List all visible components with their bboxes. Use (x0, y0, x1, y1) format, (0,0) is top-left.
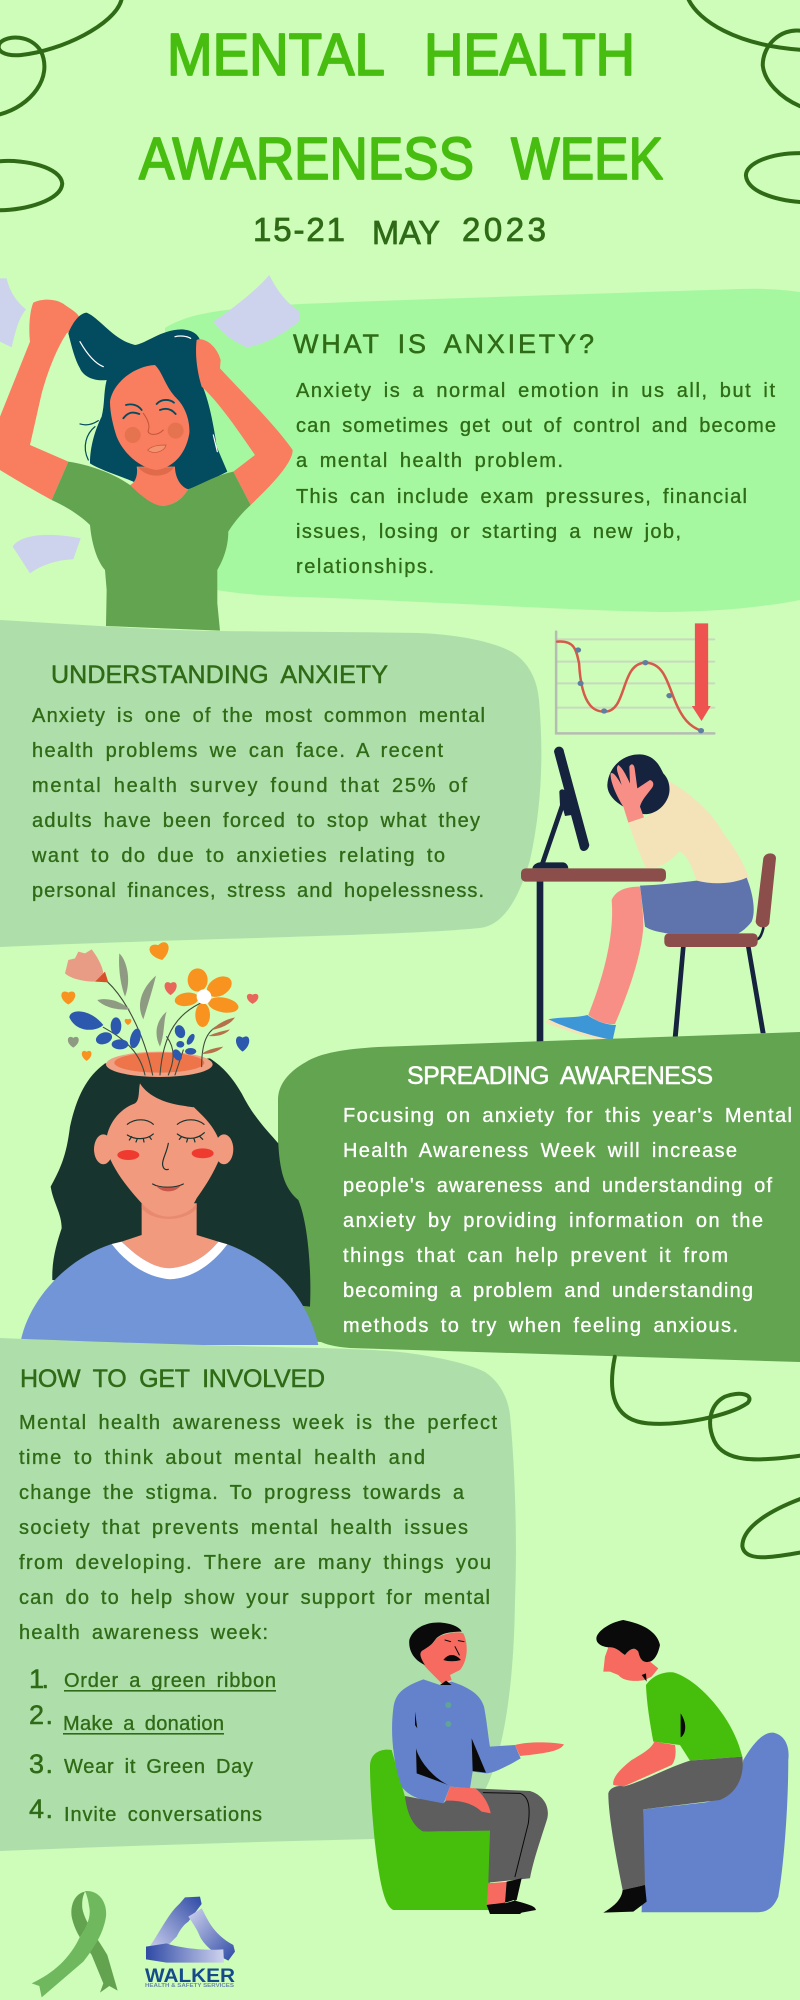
logo: Walker Health & Safety Services: WALKER (145, 1966, 235, 1987)
text block: understanding anxiety: health problems we can face. A recent (32, 740, 443, 762)
panel: how to get involved background (0, 1338, 516, 1851)
text block: spreading awareness: Focusing on anxiety for this year's Mental (343, 1105, 792, 1127)
list: ways to get involved: 4. (29, 1794, 53, 1824)
illustration: stressed woman at desk (521, 747, 776, 1045)
date: 2023 (462, 211, 546, 248)
text block: how to get involved: from developing. There are many things you (19, 1552, 491, 1574)
text block: what is anxiety: Anxiety is a normal emotion in us all, but it (296, 380, 775, 402)
date (253, 211, 546, 251)
text block: spreading awareness: becoming a problem and understanding (343, 1280, 753, 1302)
text block: what is anxiety: issues, losing or starting a new job, (296, 521, 681, 543)
text block: what is anxiety: can sometimes get out of control and become (296, 415, 776, 437)
text block: understanding anxiety: want to do due to anxieties relating to (31, 845, 445, 867)
text block: how to get involved: time to think about mental health and (19, 1447, 425, 1469)
logo: Walker Health & Safety Services (145, 1897, 235, 1989)
text block: what is anxiety: relationships. (296, 556, 434, 578)
text block: spreading awareness: people's awareness and understanding of (343, 1175, 772, 1197)
text block: understanding anxiety (31, 705, 485, 902)
panel: understanding anxiety background (0, 620, 541, 947)
text block: understanding anxiety: Anxiety is one of the most common mental (32, 705, 485, 727)
decorative curls: top corners (0, 0, 800, 210)
text block: understanding anxiety: mental health survey found that 25% of (32, 775, 467, 797)
list: ways to get involved: 1. (29, 1664, 49, 1694)
chart: falling line with red arrow (556, 623, 714, 733)
heading: what is anxiety: WHAT IS ANXIETY? (293, 329, 594, 359)
list: ways to get involved: Make a donation (63, 1713, 224, 1735)
decorative curls: lower right (612, 1357, 800, 1557)
text block: what is anxiety: This can include exam pressures, financial (296, 486, 747, 508)
text block: understanding anxiety: adults have been forced to stop what they (32, 810, 480, 832)
list: ways to get involved: 3. (29, 1749, 53, 1779)
text block: spreading awareness: methods to try when feeling anxious. (343, 1315, 738, 1337)
icon: flowers, leaves and hearts (61, 941, 258, 1075)
panel: spreading awareness background (278, 1032, 800, 1362)
title: WEEK (511, 126, 663, 192)
text block: how to get involved: Mental health awareness week is the perfect (19, 1412, 497, 1434)
date: 15-21 (253, 211, 345, 248)
text block: understanding anxiety: personal finances, stress and hopelessness. (32, 880, 484, 902)
text block: how to get involved: society that prevents mental health issues (19, 1517, 468, 1539)
illustration: two men talking on armchairs (370, 1620, 789, 1914)
list: ways to get involved: Invite conversations (64, 1804, 262, 1826)
title: MENTAL (167, 22, 385, 88)
text block: how to get involved: can do to help show your support for mental (19, 1587, 490, 1609)
text block: spreading awareness (343, 1105, 792, 1337)
text block: how to get involved (19, 1412, 497, 1644)
heading: understanding anxiety: UNDERSTANDING ANXIETY (51, 661, 388, 689)
heading: how to get involved: HOW TO GET INVOLVED (20, 1365, 325, 1393)
title (139, 22, 663, 192)
illustration: calm woman with flowers growing from head (20, 941, 318, 1345)
text block: how to get involved: change the stigma. To progress towards a (19, 1482, 465, 1504)
list: ways to get involved: 2. (29, 1700, 53, 1730)
title: AWARENESS (139, 126, 474, 192)
text block: spreading awareness: anxiety by providing information on the (343, 1210, 763, 1232)
illustration: stressed woman pulling hair (0, 275, 300, 631)
text block: spreading awareness: things that can help prevent it from (343, 1245, 728, 1267)
list: ways to get involved: Order a green ribbon (64, 1670, 276, 1692)
date: MAY (372, 214, 440, 251)
heading: spreading awareness: SPREADING AWARENESS (407, 1062, 713, 1090)
list: ways to get involved (29, 1664, 276, 1826)
list: ways to get involved: Wear it Green Day (64, 1756, 253, 1778)
text block: how to get involved: health awareness week: (19, 1622, 268, 1644)
icon: green awareness ribbon (32, 1891, 118, 1997)
panel: what is anxiety background (165, 289, 800, 612)
logo: Walker Health & Safety Services: HEALTH & SAFETY SERVICES (145, 1983, 235, 1989)
text block: what is anxiety: a mental health problem. (296, 450, 563, 472)
title: HEALTH (424, 22, 635, 88)
text block: spreading awareness: Health Awareness Week will increase (343, 1140, 737, 1162)
text block: what is anxiety (296, 380, 776, 578)
